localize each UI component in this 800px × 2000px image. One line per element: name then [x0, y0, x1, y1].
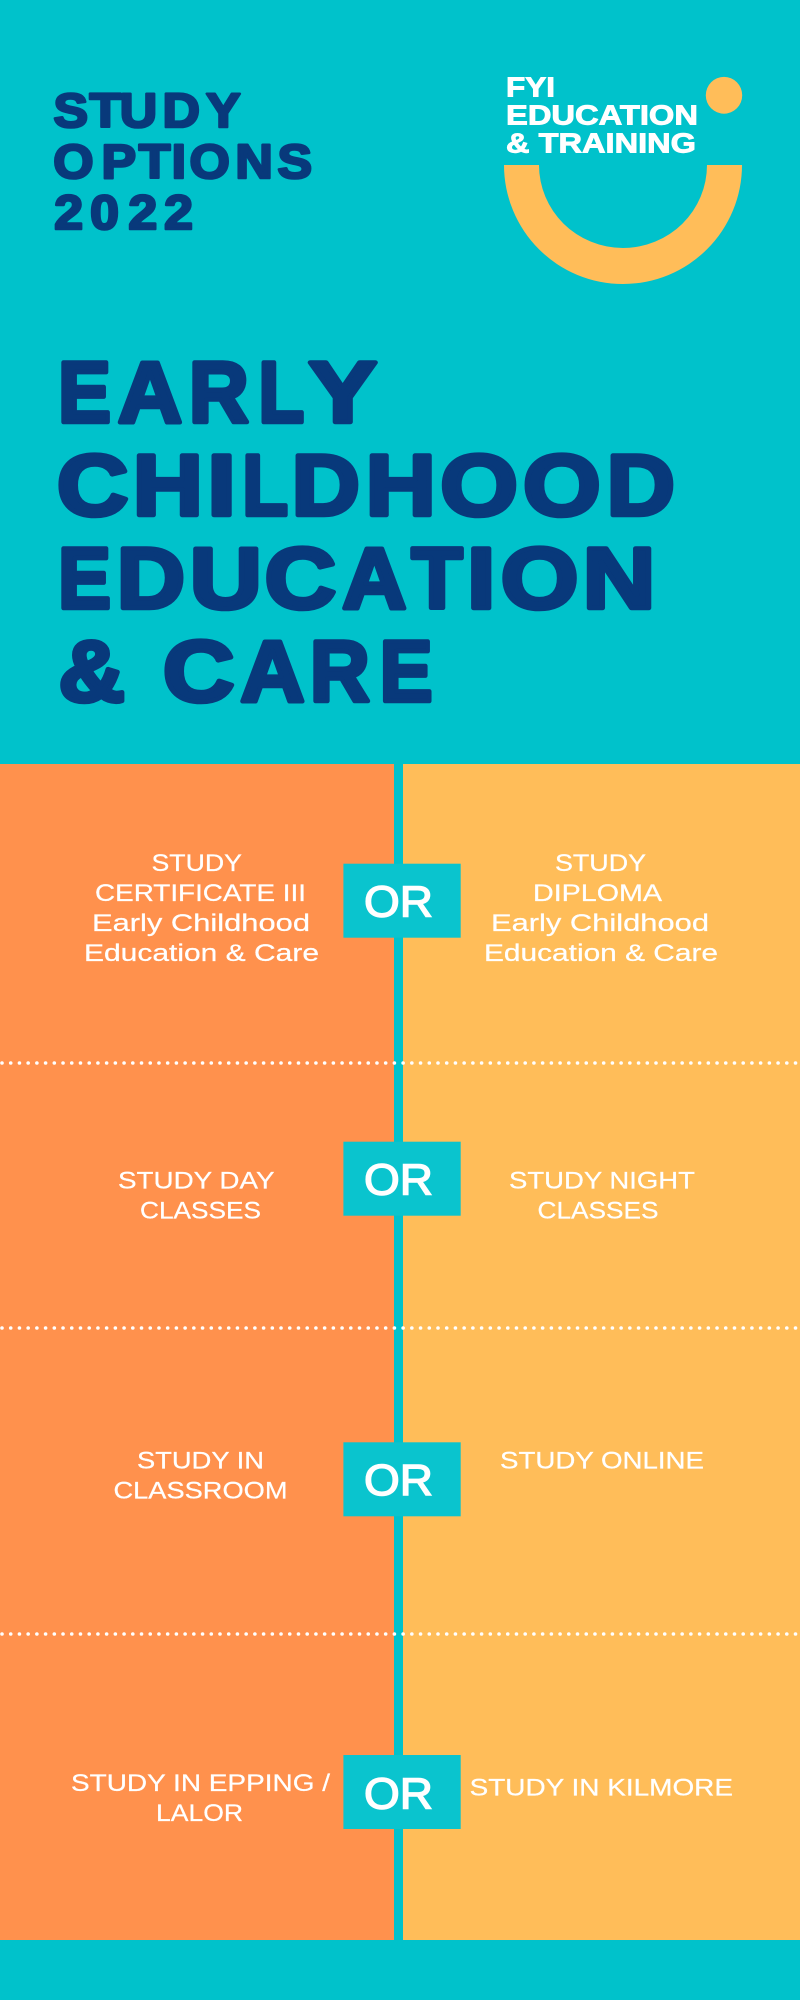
left option: certificate III: [84, 850, 319, 967]
main title: I: [207, 439, 236, 534]
main title: H: [366, 439, 436, 534]
main title: N: [583, 532, 655, 627]
right option: diploma: Education & Care: [484, 940, 718, 967]
left option: certificate III: CERTIFICATE III: [95, 880, 306, 907]
main title: D: [117, 532, 185, 627]
main title: O: [501, 532, 578, 627]
left option: certificate III: Education & Care: [84, 940, 319, 967]
row 2: day or night classes: [118, 1142, 695, 1224]
left option: Epping / Lalor: LALOR: [156, 1800, 243, 1827]
main title: O: [523, 439, 601, 534]
icon: logo dot: [706, 77, 742, 114]
logo wordmark: & TRAINING: [506, 128, 696, 158]
logo wordmark: FYI: [506, 72, 555, 102]
main title: E: [380, 625, 432, 720]
right option: diploma: DIPLOMA: [533, 880, 663, 907]
left option: certificate III: STUDY: [152, 850, 242, 877]
OR badge: OR: [364, 1770, 433, 1818]
main title: A: [118, 346, 182, 441]
main title: R: [310, 625, 370, 720]
right option: night classes: CLASSES: [538, 1198, 658, 1224]
heading: study options 2022: [53, 84, 312, 240]
heading: study options 2022: OPTIONS: [53, 135, 312, 189]
right option: night classes: STUDY NIGHT: [509, 1168, 695, 1194]
logo wordmark: EDUCATION: [506, 100, 698, 130]
main title: L: [259, 346, 304, 441]
OR badge: [343, 1442, 461, 1516]
main title: C: [163, 625, 234, 720]
right option: online: STUDY ONLINE: [500, 1448, 704, 1474]
left option: classroom: [114, 1448, 288, 1504]
right option: diploma: [484, 850, 718, 967]
left option: day classes: STUDY DAY: [118, 1168, 274, 1194]
OR badge: OR: [364, 1456, 433, 1505]
OR badge: [343, 864, 461, 938]
main title: D: [607, 439, 675, 534]
main title: T: [411, 532, 463, 627]
OR badge: OR: [364, 1156, 433, 1204]
panel: left column: [0, 764, 394, 1940]
left option: certificate III: Early Childhood: [92, 910, 310, 937]
main title: I: [467, 532, 495, 627]
row 1: certificate or diploma: [84, 850, 718, 967]
main title: O: [440, 439, 518, 534]
right option: Kilmore: STUDY IN KILMORE: [470, 1774, 733, 1802]
main title: U: [190, 532, 262, 627]
main title: &: [59, 625, 125, 720]
main title: A: [342, 532, 406, 627]
left option: Epping / Lalor: STUDY IN EPPING /: [71, 1770, 330, 1797]
main title: H: [133, 439, 203, 534]
main title: C: [265, 532, 336, 627]
main title: E: [58, 346, 111, 441]
logo: FYI Education & Training: [504, 72, 742, 284]
heading: study options 2022: STUDY: [53, 84, 241, 138]
left option: day classes: CLASSES: [140, 1198, 261, 1224]
left option: classroom: CLASSROOM: [114, 1478, 288, 1504]
main title: L: [242, 439, 288, 534]
main title: [57, 346, 675, 720]
main title: A: [240, 625, 305, 720]
icon: logo smile: [504, 165, 742, 284]
left option: classroom: STUDY IN: [137, 1448, 264, 1474]
main title: R: [189, 346, 249, 441]
left option: Epping / Lalor: [71, 1770, 330, 1827]
OR badge: [343, 1142, 461, 1216]
panel: right column: [403, 764, 800, 1940]
main title: Y: [309, 346, 377, 441]
logo wordmark: [506, 72, 698, 158]
right option: diploma: STUDY: [555, 850, 646, 877]
main title: D: [292, 439, 360, 534]
main title: E: [58, 532, 111, 627]
heading: study options 2022: 2022: [54, 186, 193, 240]
OR badge: OR: [364, 878, 433, 926]
main title: C: [57, 439, 128, 534]
OR badge: [343, 1755, 461, 1829]
left option: day classes: [118, 1168, 274, 1224]
right option: diploma: Early Childhood: [491, 910, 709, 937]
row 4: campus location: [71, 1755, 733, 1829]
row 3: classroom or online: [114, 1442, 704, 1516]
right option: night classes: [509, 1168, 695, 1224]
